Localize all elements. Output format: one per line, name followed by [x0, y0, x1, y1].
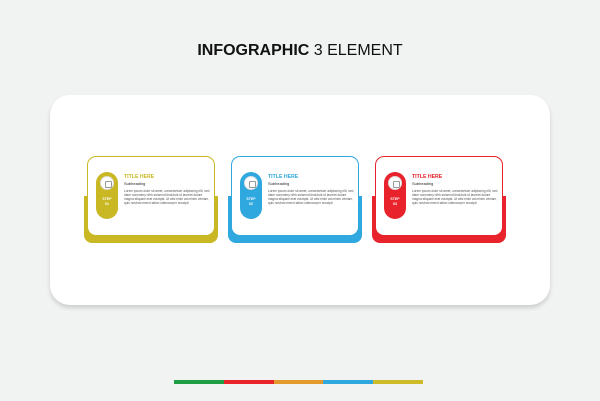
text 03 — [412, 174, 498, 205]
text 03: Subheading — [412, 181, 433, 186]
icon pill 03 — [384, 172, 406, 219]
card: step 02 — [228, 156, 362, 243]
text 02: TITLE HERE — [268, 174, 298, 180]
text 01 — [124, 174, 210, 205]
icon pill 01: 01 — [105, 202, 109, 206]
text 02: Lorem ipsum dolor sit amet, consectetuer adipiscing elit, sed diam nonummy nibh euismod tincidunt ut laoreet dolore magna aliquam erat volutpat. Ut wisi enim ad minim veniam, quis nostrud exerci tation ullamcorper suscipit — [268, 189, 353, 205]
text 01: TITLE HERE — [124, 174, 154, 180]
title: INFOGRAPHIC 3 ELEMENT — [197, 42, 403, 59]
card: step 01 — [84, 156, 218, 243]
icon pill 02 — [240, 172, 262, 219]
icon pill 03: STEP — [390, 197, 400, 201]
text 03: Lorem ipsum dolor sit amet, consectetuer adipiscing elit, sed diam nonummy nibh euismod tincidunt ut laoreet dolore magna aliquam erat volutpat. Ut wisi enim ad minim veniam, quis nostrud exerci tation ullamcorper suscipit — [412, 189, 497, 205]
color bar — [174, 380, 423, 384]
text 01: Lorem ipsum dolor sit amet, consectetuer adipiscing elit, sed diam nonummy nibh euismod tincidunt ut laoreet dolore magna aliquam erat volutpat. Ut wisi enim ad minim veniam, quis nostrud exerci tation ullamcorper suscipit — [124, 189, 209, 205]
text 02: Subheading — [268, 181, 289, 186]
text 02 — [268, 174, 354, 205]
icon pill 01: STEP — [102, 197, 112, 201]
icon pill 03: 03 — [393, 202, 397, 206]
text 01: Subheading — [124, 181, 145, 186]
icon pill 02: 02 — [249, 202, 253, 206]
text 03: TITLE HERE — [412, 174, 442, 180]
icon pill 02: STEP — [246, 197, 256, 201]
panel: main white card — [50, 95, 550, 305]
card: step 03 — [372, 156, 506, 243]
icon pill 01 — [96, 172, 118, 219]
